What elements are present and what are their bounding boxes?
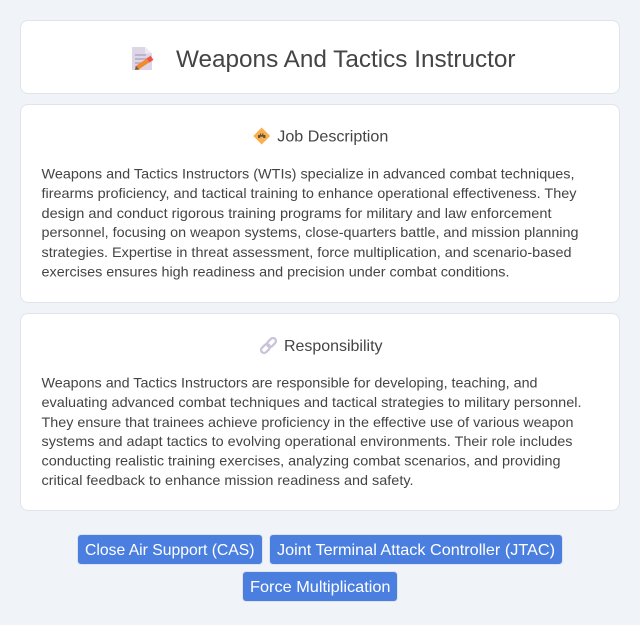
tag: Close Air Support: Close Air Support (CAS) (85, 542, 254, 559)
icon: job description diamond (253, 128, 270, 144)
tag: Close Air Support (77, 534, 263, 565)
text: responsibility body (42, 374, 582, 488)
tag: Force Multiplication (242, 571, 398, 602)
tag: Force Multiplication: Force Multiplication (250, 579, 390, 596)
panel: responsibility (20, 313, 620, 511)
text: responsibility body: systems and adapt tactics to evolving operational environments. Their role includes (42, 433, 572, 449)
heading: responsibility: Responsibility (284, 338, 382, 355)
tag: JTAC (269, 534, 563, 565)
text: job description body: design and conduct rigorous training programs for military and law enforcement (42, 205, 552, 221)
icon: chain link (260, 336, 277, 354)
text: job description body: Weapons and Tactics Instructors (WTIs) specialize in advanced combat techniques, (42, 166, 574, 182)
text: job description body (42, 166, 578, 280)
text: responsibility body: conducting realistic training exercises, analyzing combat scenarios, and providing (42, 452, 560, 468)
icon: document with pencil (132, 47, 154, 70)
text: responsibility body: Weapons and Tactics Instructors are responsible for developing, teaching, and (42, 374, 538, 390)
text: responsibility body: evaluating advanced combat techniques and tactical strategies to military personnel. (42, 394, 582, 410)
tag: JTAC: Joint Terminal Attack Controller (JTAC) (277, 542, 555, 559)
text: job description body: firearms proficiency, and tactical training to enhance operational effectiveness. They (42, 185, 576, 201)
text: job description body: personnel, focusing on weapon systems, close-quarters battle, and mission planning (42, 224, 578, 240)
heading: job description: Job Description (277, 129, 388, 146)
text: responsibility body: They ensure that trainees achieve proficiency in the effective use of various weapon (42, 414, 574, 430)
title: Weapons And Tactics Instructor (176, 46, 516, 73)
text: job description body: exercises ensures high readiness and precision under combat conditions. (42, 264, 509, 280)
panel: job description (20, 104, 620, 303)
text: responsibility body: critical feedback to enhance mission readiness and safety. (42, 472, 414, 488)
text: job description body: strategies. Expertise in threat assessment, force multiplication, and scenario-based (42, 244, 572, 260)
panel: title card (20, 20, 620, 94)
